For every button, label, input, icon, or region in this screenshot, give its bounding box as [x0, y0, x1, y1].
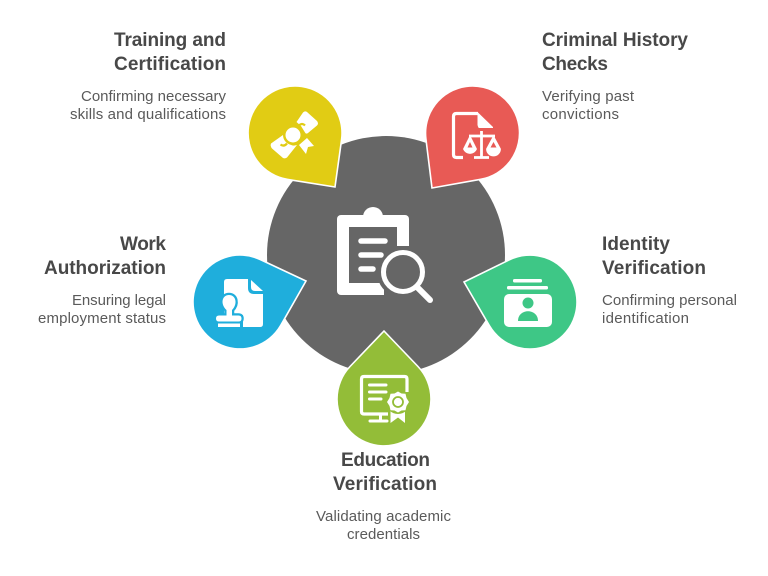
panel: identity verification — [464, 234, 737, 349]
heading: identity: Verification — [602, 258, 706, 279]
heading: training — [114, 30, 226, 75]
heading: training: Certification — [114, 54, 226, 75]
heading: work authorization: Work — [120, 234, 166, 255]
icon: clipboard with magnifier — [337, 207, 430, 300]
pin: blue — [193, 255, 306, 349]
icon: diploma scroll — [271, 111, 318, 158]
description: work authorization: employment status — [38, 310, 166, 327]
panel: criminal history checks — [426, 30, 688, 188]
description: education: credentials — [347, 526, 420, 543]
description: training: Confirming necessary — [81, 88, 226, 105]
pin: olive green — [337, 331, 431, 446]
description: criminal history: convictions — [542, 106, 619, 123]
heading: criminal history: Checks — [542, 54, 608, 75]
description: work authorization — [38, 292, 166, 327]
description: criminal history — [542, 88, 635, 123]
pin: yellow — [248, 86, 342, 187]
pin: green — [464, 255, 577, 349]
heading: identity: Identity — [602, 234, 670, 255]
description: training: skills and qualifications — [70, 106, 226, 123]
description: training — [70, 88, 226, 123]
description: education: Validating academic — [316, 508, 452, 525]
description: identity: Confirming personal — [602, 292, 737, 309]
heading: work authorization: Authorization — [44, 258, 166, 279]
pin: red — [426, 86, 520, 188]
description: identity — [602, 292, 737, 327]
description: identity: identification — [602, 310, 689, 327]
heading: training: Training and — [114, 30, 226, 51]
heading: criminal history: Criminal History — [542, 30, 688, 51]
heading: education — [333, 450, 437, 495]
heading: education: Verification — [333, 474, 437, 495]
icon: id card — [504, 279, 552, 327]
description: criminal history: Verifying past — [542, 88, 635, 105]
icon: document with scales — [454, 112, 500, 158]
central hub circle — [267, 136, 505, 374]
description: education — [316, 508, 452, 543]
description: work authorization: Ensuring legal — [72, 292, 166, 309]
icon: document with stamp — [216, 279, 263, 328]
heading: identity — [602, 234, 706, 279]
heading: education: Education — [341, 450, 430, 471]
icon: monitor with certificate — [362, 376, 410, 423]
panel: work authorization — [38, 234, 306, 349]
panel: training and certification — [70, 30, 342, 187]
panel: education verification — [316, 331, 452, 543]
heading: work authorization — [44, 234, 166, 279]
heading: criminal history — [542, 30, 688, 75]
